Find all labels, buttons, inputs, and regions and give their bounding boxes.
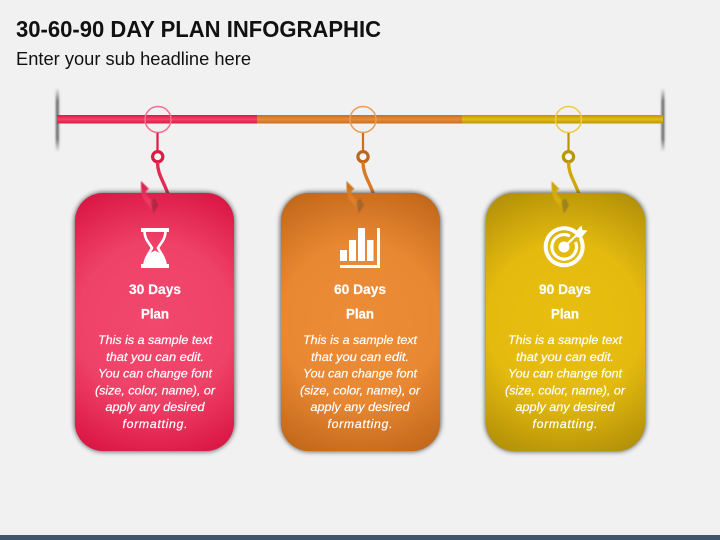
body text — [505, 333, 626, 431]
body text: that you can edit. — [311, 350, 409, 364]
panel: 30 days — [74, 181, 235, 452]
body text: apply any desired — [310, 400, 411, 414]
hook barb — [346, 181, 364, 214]
body text: This is a sample text — [98, 333, 213, 347]
icon: bar chart — [340, 228, 380, 268]
timeline bar — [56, 88, 664, 152]
title: 30-60-90 DAY PLAN INFOGRAPHIC — [16, 16, 381, 42]
body text: You can change font — [303, 366, 418, 380]
body text: (size, color, name), or — [505, 384, 626, 398]
body text: that you can edit. — [106, 350, 204, 364]
body text — [300, 333, 421, 431]
body text — [95, 333, 216, 431]
body text: This is a sample text — [303, 333, 418, 347]
hanger: 60 days — [350, 106, 376, 194]
body text: apply any desired — [106, 400, 206, 414]
body text: This is a sample text — [508, 333, 623, 347]
body text: apply any desired — [516, 400, 616, 414]
hook barb — [552, 181, 569, 214]
heading line 2: Plan — [346, 306, 374, 322]
panel: 90 days — [485, 181, 646, 452]
subtitle: Enter your sub headline here — [16, 49, 251, 69]
icon: hourglass — [141, 228, 169, 268]
hanger: 90 days — [556, 106, 582, 194]
hook barb — [141, 181, 158, 214]
body text: formatting. — [122, 417, 188, 431]
body text: formatting. — [328, 417, 392, 431]
panel: 60 days — [280, 181, 441, 452]
body text: (size, color, name), or — [95, 384, 216, 398]
icon: target — [546, 226, 588, 265]
heading: 90 Days — [539, 281, 591, 297]
body text: You can change font — [508, 366, 623, 380]
footer bar — [0, 535, 720, 540]
body text: (size, color, name), or — [300, 384, 421, 398]
heading line 2: Plan — [141, 306, 169, 322]
heading line 2: Plan — [551, 306, 579, 322]
hanger: 30 days — [145, 106, 171, 194]
body text: formatting. — [532, 417, 598, 431]
body text: You can change font — [98, 366, 213, 380]
heading: 60 Days — [334, 281, 386, 297]
body text: that you can edit. — [516, 350, 614, 364]
heading: 30 Days — [129, 281, 181, 297]
